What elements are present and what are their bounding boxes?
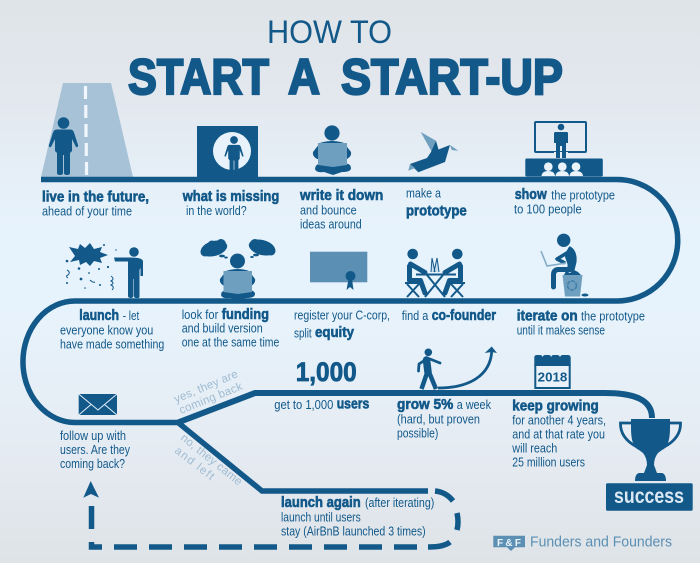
text: get to 1,000 users xyxy=(274,396,369,412)
text: look for funding: funding xyxy=(222,306,269,323)
text: keep growing: will reach xyxy=(511,441,557,455)
text: launch again xyxy=(281,494,434,538)
text: register C-corp: register your C-corp, xyxy=(294,308,390,322)
icon: person in a frame xyxy=(197,126,258,178)
icon: calendar 2018 xyxy=(534,355,571,388)
text: launch again: (after iterating) xyxy=(365,496,434,510)
text: register C-corp: split xyxy=(294,326,312,340)
label: no, they came and left: no, they came xyxy=(178,432,244,488)
text: follow up with users: users. Are they xyxy=(60,443,131,457)
text: find a co-founder: find a xyxy=(402,309,428,323)
logo: Funders and Founders: Funders and Founders xyxy=(530,534,672,551)
text: launch: have made something xyxy=(60,337,164,351)
text: show the prototype: to 100 people xyxy=(514,202,582,216)
text: follow up with users: follow up with xyxy=(60,429,126,443)
text: make a prototype: make a xyxy=(406,187,441,201)
text: live in the future xyxy=(42,188,149,218)
label: yes, they are coming back: coming back xyxy=(178,381,245,417)
icon: envelope xyxy=(79,394,117,415)
text: launch again: launch until users xyxy=(281,510,361,524)
text: grow 5%: (hard, but proven xyxy=(397,412,480,426)
text: make a prototype: prototype xyxy=(406,202,467,220)
text: write it down: ideas around xyxy=(300,217,362,231)
text: launch xyxy=(60,307,164,351)
text: register C-corp: equity xyxy=(315,324,355,341)
text: grow 5%: possible) xyxy=(397,426,438,440)
text: write it down xyxy=(299,187,383,231)
arrow: return to follow up xyxy=(83,481,99,498)
text: iterate on xyxy=(517,308,645,338)
text: make a prototype xyxy=(406,187,467,220)
icon: road with person xyxy=(41,83,133,177)
road: no branch to launch again xyxy=(178,422,428,491)
text: live in the future: live in the future, xyxy=(42,188,149,206)
text: 1,000: 1,000 xyxy=(296,357,357,387)
icon: walking person xyxy=(418,348,440,389)
text: keep growing: and at that rate you xyxy=(512,427,605,441)
text: look for funding: look for xyxy=(182,308,218,322)
icon: certificate with seal xyxy=(310,252,367,290)
icon: person writing on a laptop xyxy=(313,125,351,175)
text: iterate on: iterate on xyxy=(517,308,578,324)
text: write it down: and bounce xyxy=(300,203,357,217)
label: yes, they are coming back: yes, they are xyxy=(173,368,240,406)
title: A xyxy=(288,49,320,105)
text: launch: everyone know you xyxy=(60,323,153,337)
icon: presenting to an audience xyxy=(525,122,603,176)
icon: person iterating over recycle bin xyxy=(541,234,588,296)
arrow: growth curve xyxy=(438,346,497,388)
icon: two co-founders at a table xyxy=(405,249,465,297)
icon: trophy xyxy=(620,419,681,481)
success badge: success xyxy=(614,485,684,508)
text: what is missing xyxy=(182,188,279,218)
text: get to 1,000 users: get to 1,000 xyxy=(274,398,333,412)
text: grow 5%: a week xyxy=(457,398,492,412)
text: what is missing: in the world? xyxy=(186,204,247,218)
text: grow 5%: grow 5% xyxy=(397,396,453,413)
text: iterate on: until it makes sense xyxy=(517,324,605,338)
text: launch: - let xyxy=(123,309,140,323)
text: keep growing: 25 million users xyxy=(512,455,585,469)
logo: Funders and Founders: F&F xyxy=(497,538,521,549)
text: show the prototype: the prototype xyxy=(551,188,615,202)
text: follow up with users: coming back? xyxy=(60,457,125,471)
text: launch again: launch again xyxy=(281,494,361,511)
text: find a co-founder: co-founder xyxy=(432,307,496,324)
text: keep growing: for another 4 years, xyxy=(512,413,606,427)
title xyxy=(128,14,563,105)
icon: origami bird xyxy=(408,132,458,172)
text: find a co-founder xyxy=(402,307,496,324)
text: write it down: write it down xyxy=(299,187,383,204)
text: get to 1,000 users: users xyxy=(337,396,369,412)
text: show the prototype: show xyxy=(515,186,547,203)
text: look for funding: and build version xyxy=(182,322,263,336)
title: START xyxy=(128,49,269,105)
text: register C-corp xyxy=(294,308,390,341)
road: main winding path xyxy=(23,180,678,422)
label: no, they came and left: and left xyxy=(172,445,217,483)
text: launch: launch xyxy=(79,307,119,324)
text: follow up with users xyxy=(60,429,131,471)
text: live in the future: ahead of your time xyxy=(42,204,132,218)
text: look for funding xyxy=(182,306,279,350)
text: what is missing: what is missing xyxy=(182,188,279,205)
icon: person with funding thought clouds xyxy=(199,237,277,300)
text: keep growing: keep growing xyxy=(512,398,599,414)
text: grow 5% xyxy=(397,396,492,440)
text: iterate on: the prototype xyxy=(581,310,645,324)
text: look for funding: one at the same time xyxy=(182,336,279,350)
title: HOW TO xyxy=(267,14,392,50)
text: show the prototype xyxy=(514,186,615,216)
icon: calendar 2018: 2018 xyxy=(538,370,567,384)
road: yes branch to success xyxy=(178,393,652,422)
icon: launch person with explosion xyxy=(66,243,143,298)
text: launch again: stay (AirBnB launched 3 times) xyxy=(281,524,426,538)
title: START-UP xyxy=(341,49,563,105)
text: keep growing xyxy=(511,398,606,469)
road: dashed loop back xyxy=(92,491,458,547)
